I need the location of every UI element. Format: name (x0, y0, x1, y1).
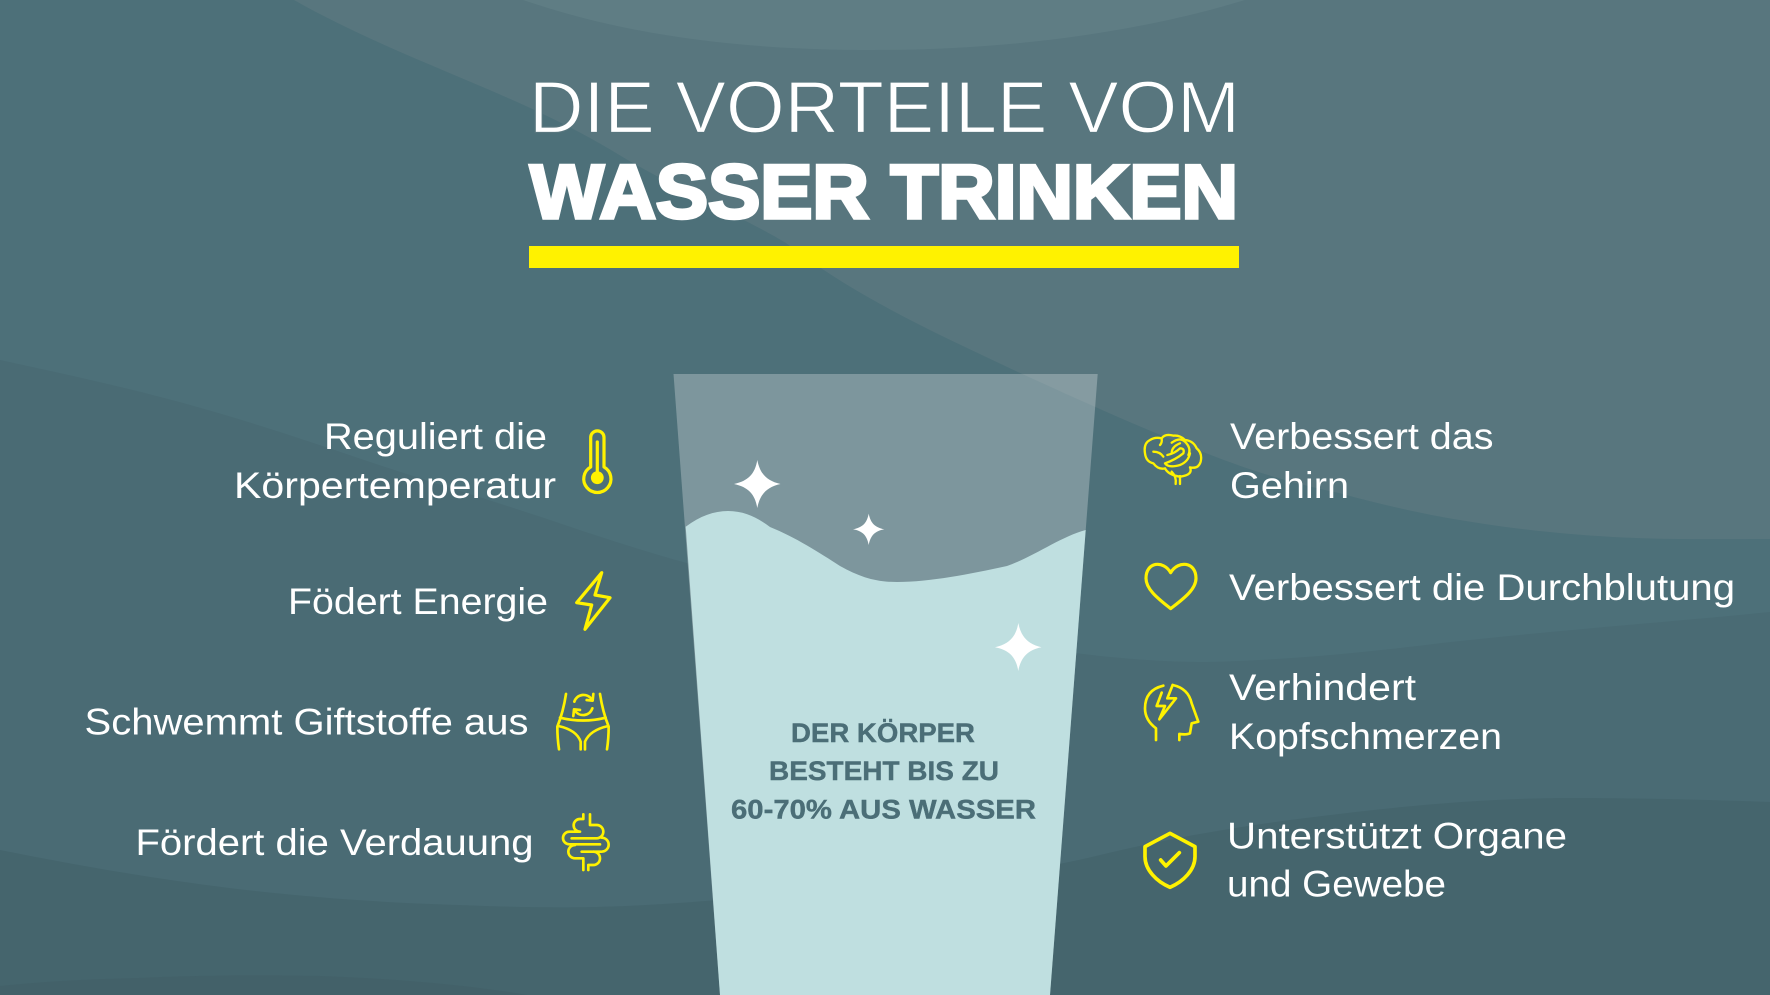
label: und Gewebe (1227, 864, 1446, 904)
sparkle 1 (734, 460, 780, 508)
label: Unterstützt Organe (1227, 816, 1567, 856)
icon: thermometer (584, 431, 611, 492)
glass caption: BESTEHT BIS ZU (769, 756, 999, 786)
glass body (674, 374, 1098, 995)
title (529, 68, 1240, 268)
label: Gehirn (1230, 465, 1349, 506)
label: Körpertemperatur (234, 465, 556, 506)
label: Verbessert die Durchblutung (1229, 567, 1735, 608)
glass caption: DER KÖRPER (791, 718, 975, 748)
label (1230, 416, 1494, 506)
benefit: Giftstoffe (84, 694, 609, 749)
label: Reguliert die (324, 416, 547, 457)
label: Verbessert das (1230, 416, 1494, 457)
glass caption (731, 718, 1036, 824)
benefit: Organe (1145, 816, 1567, 904)
sparkle 3 (995, 623, 1042, 671)
label: Verhindert (1229, 667, 1417, 708)
icon: lightning bolt (577, 573, 610, 629)
benefit: Energie (288, 573, 610, 629)
benefit: Durchblutung (1146, 564, 1735, 609)
title line 1: DIE VORTEILE VOM (529, 68, 1240, 148)
title underline (529, 246, 1239, 268)
icon: heart (1146, 564, 1196, 609)
label: Födert Energie (288, 581, 548, 622)
glass (674, 374, 1098, 995)
label: Fördert die Verdauung (136, 822, 534, 863)
benefit: Verdauung (136, 814, 609, 870)
benefit: Gehirn (1145, 416, 1494, 506)
label (234, 416, 556, 506)
glass caption: 60-70% AUS WASSER (731, 794, 1036, 824)
label: Schwemmt Giftstoffe aus (84, 702, 528, 742)
water (686, 511, 1086, 995)
label (1229, 667, 1502, 757)
benefit: Körpertemperatur (234, 416, 611, 506)
icon: belly with cycle arrows (557, 694, 609, 749)
benefit: Kopfschmerzen (1145, 667, 1502, 757)
icon: shield with check (1145, 833, 1195, 887)
title line 2: WASSER TRINKEN (530, 150, 1238, 235)
label (1227, 816, 1567, 904)
sparkle 2 (853, 514, 884, 545)
icon: head with bolt (1145, 685, 1198, 740)
icon: intestine (563, 814, 609, 870)
label: Kopfschmerzen (1229, 716, 1502, 757)
icon: brain (1145, 435, 1201, 484)
